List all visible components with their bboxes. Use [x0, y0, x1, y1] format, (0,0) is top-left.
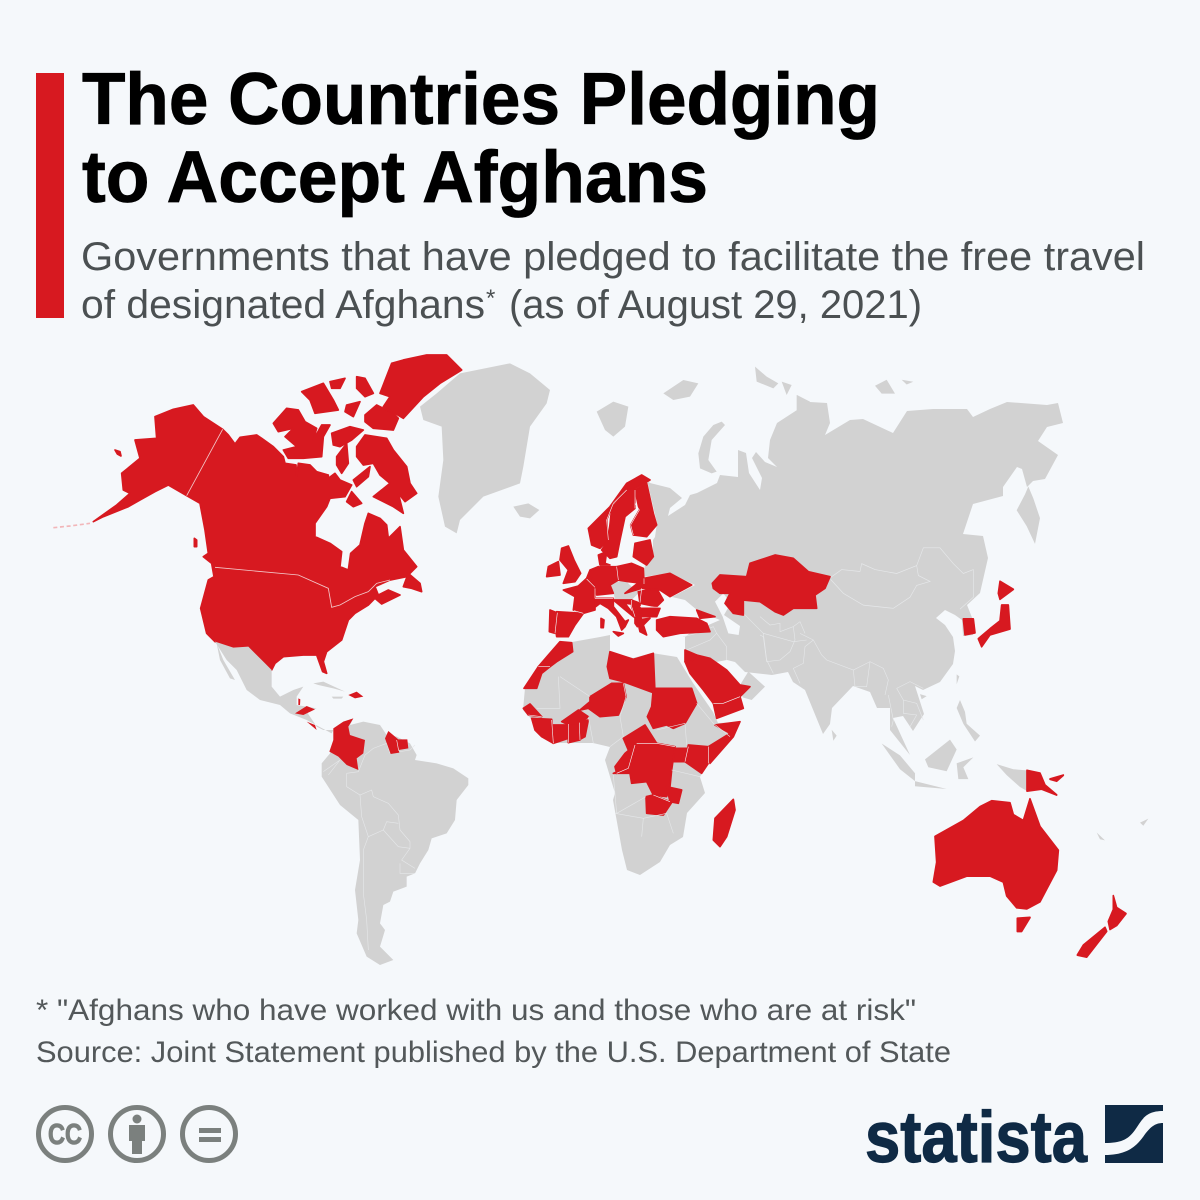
- North America red: Canada and United States: [53, 355, 462, 673]
- statista logo mark: [1105, 1105, 1163, 1163]
- Mexico and Central America: [215, 642, 363, 733]
- Africa landmass: [523, 635, 740, 875]
- red title accent bar: [36, 73, 64, 318]
- South America: [322, 718, 468, 965]
- subtitle: [81, 235, 1145, 327]
- Eurasia landmass: [643, 395, 1063, 755]
- Europe, Middle East, Africa and Kazakhstan red countries: [523, 475, 830, 847]
- Asia-Pacific red countries: Japan, South Korea, Australia, New Zealand, Papua New Guinea: [933, 581, 1126, 957]
- icon: creative commons: [38, 1108, 92, 1160]
- title: to Accept Afghans: [82, 137, 708, 218]
- Iceland: [513, 503, 539, 518]
- Oman and Gulf states: [740, 672, 765, 700]
- world map: [53, 355, 1148, 965]
- Africa borders: [537, 677, 730, 837]
- title: [82, 59, 880, 218]
- footnote and source: Source: Joint Statement published by the U.S. Department of State: [36, 1036, 951, 1069]
- Asia and Pacific islands: [832, 380, 1148, 840]
- statista wordmark: statista: [865, 1098, 1088, 1178]
- footnote and source: [36, 994, 951, 1069]
- Greenland: [420, 363, 550, 533]
- Russia, China and Mongolia borders: [831, 548, 973, 609]
- footnote and source: * "Afghans who have worked with us and those who are at risk": [36, 994, 916, 1027]
- Central Europe grey countries: [610, 580, 640, 600]
- subtitle: (as of August 29, 2021): [509, 283, 922, 327]
- Arctic islands: [597, 367, 810, 473]
- subtitle: *: [486, 285, 495, 312]
- Asia borders: [760, 617, 923, 727]
- icon: creative commons: CC: [48, 1119, 82, 1151]
- title: The Countries Pledging: [82, 59, 880, 140]
- Middle East and Central Asia borders: [683, 613, 807, 673]
- icon: attribution person: [110, 1108, 164, 1160]
- subtitle: of designated Afghans: [81, 283, 485, 327]
- Caspian Sea: [715, 593, 740, 635]
- subtitle: Governments that have pledged to facilitate the free travel: [81, 235, 1145, 279]
- icon: no derivatives equals: [182, 1108, 236, 1160]
